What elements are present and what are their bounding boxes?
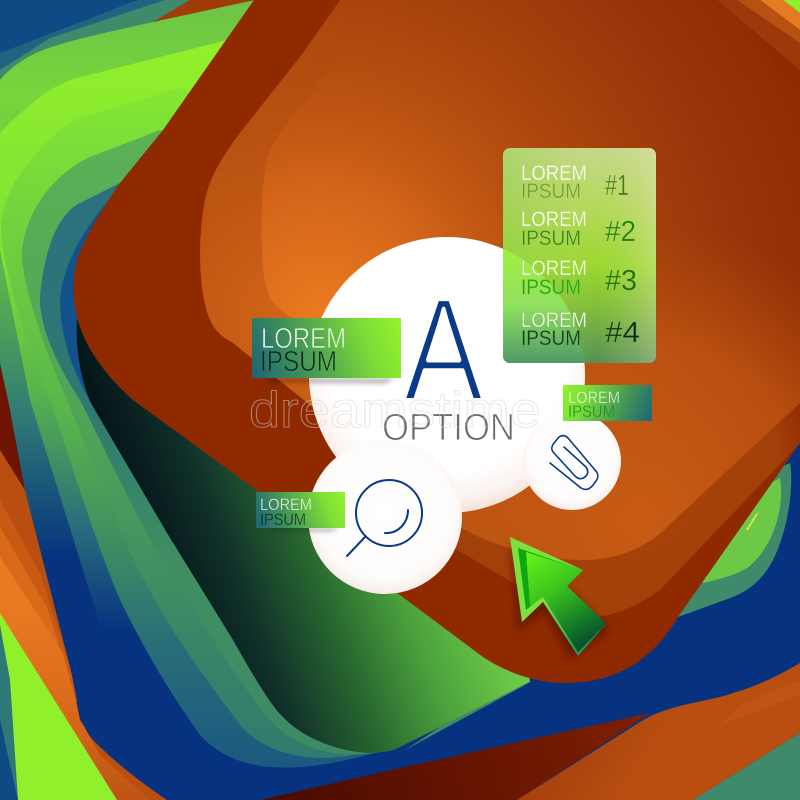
label: small lorem ipsum right: IPSUM: [568, 402, 615, 421]
row 4: IPSUM: [521, 327, 581, 350]
orange layer 4: [262, 20, 620, 400]
row 2: #2: [605, 216, 636, 248]
magnifier white circle: [308, 440, 462, 594]
panel: ranked list: [503, 148, 656, 363]
option label: OPTION: [382, 407, 515, 449]
label: small lorem ipsum left: [256, 492, 345, 532]
row 2: [521, 208, 636, 250]
paperclip white circle: [523, 412, 621, 510]
curved band 3: [1, 88, 600, 768]
row 3: LOREM: [521, 257, 587, 280]
teal strip under green shape: [405, 680, 533, 750]
lime wedge bottom-left: [0, 613, 117, 800]
label: large lorem ipsum: IPSUM: [260, 346, 337, 378]
bottom-left orange stripes: [0, 340, 167, 800]
icon: paperclip: [550, 436, 598, 489]
brown layer 2: [440, 300, 800, 617]
label: large lorem ipsum: LOREM: [261, 323, 346, 355]
row 1: #1: [605, 170, 629, 202]
teal bottom-right corner: [693, 733, 800, 800]
dark red bottom band: [260, 713, 650, 800]
dark to green rounded shape: [77, 300, 530, 753]
curved band 1: [0, 0, 600, 800]
top-right corner stripes: [717, 0, 800, 70]
row 3: [521, 257, 637, 299]
curved band 5: [40, 183, 600, 755]
orange lower-right glow: [450, 200, 800, 560]
curved band 2: [0, 40, 600, 777]
row 1: IPSUM: [521, 180, 581, 203]
label: large lorem ipsum: [252, 318, 401, 384]
row 4: #4: [605, 317, 640, 349]
main rounded brown shape: [74, 0, 800, 683]
icon: magnifier: [347, 480, 422, 556]
orange layer 3: [200, 0, 800, 560]
row 4: LOREM: [521, 309, 587, 332]
top-left corner stripes: [0, 0, 256, 85]
watermark: dreamstime: [249, 382, 541, 438]
label: small lorem ipsum left: IPSUM: [260, 510, 306, 529]
row 2: IPSUM: [521, 227, 581, 250]
right green sliver: [678, 463, 791, 617]
label: small lorem ipsum right: [563, 385, 652, 421]
curved band 4: [22, 130, 600, 758]
label: small lorem ipsum right: LOREM: [568, 388, 620, 407]
large white circle: [309, 237, 585, 513]
row 2: LOREM: [521, 208, 587, 231]
row 1: [521, 162, 629, 203]
orange bottom-right band: [517, 663, 800, 800]
row 4: [521, 309, 640, 350]
curved band 6 blue: [60, 190, 300, 405]
label: small lorem ipsum left: LOREM: [260, 495, 312, 514]
row 3: #3: [605, 265, 637, 297]
big letter A: A: [403, 266, 484, 432]
row 3: IPSUM: [521, 276, 581, 299]
arrow cursor: [510, 537, 610, 660]
row 1: LOREM: [521, 162, 587, 185]
